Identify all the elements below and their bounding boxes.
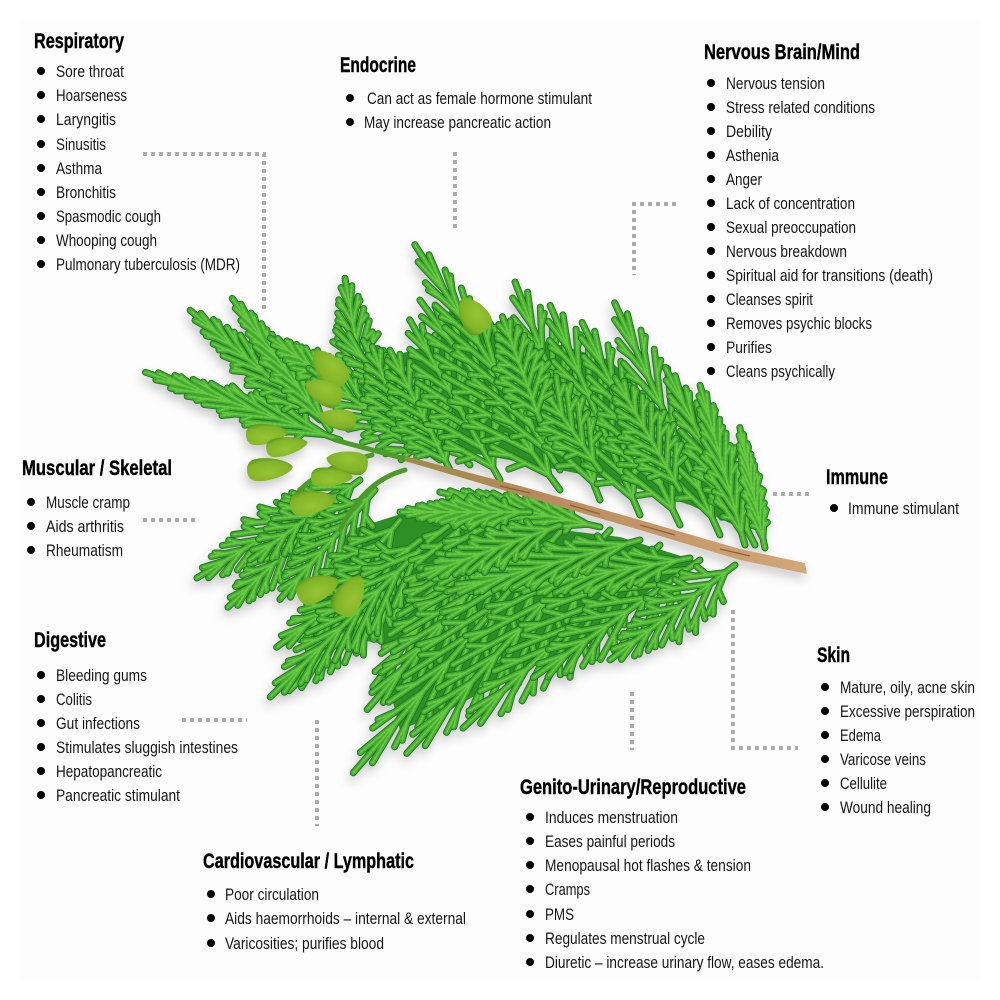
list: respiratory: Sinusitis: [56, 135, 106, 154]
list: respiratory: Whooping cough: [56, 231, 157, 250]
list: respiratory: Spasmodic cough: [56, 207, 161, 226]
connector: digestive: [182, 718, 247, 722]
thuja branch illustration: [140, 229, 807, 797]
list: genito-urinary/reproductive: [526, 808, 824, 972]
list: skin: Cellulite: [840, 774, 887, 793]
list: respiratory: Laryngitis: [56, 110, 116, 129]
list: immune: Immune stimulant: [848, 499, 959, 518]
list: respiratory: Bronchitis: [56, 183, 116, 202]
upper foliage: [140, 229, 776, 555]
list: genito-urinary/reproductive: Induces menstruation: [545, 808, 678, 827]
list: muscular / skeletal: Muscle cramp: [46, 493, 130, 512]
heading: respiratory: Respiratory: [34, 30, 124, 53]
panel: digestive: [34, 629, 238, 805]
list: digestive: [37, 666, 238, 805]
connector: immune: [773, 492, 810, 496]
list: digestive: Pancreatic stimulant: [56, 786, 180, 805]
list: nervous brain/mind: Sexual preoccupation: [726, 218, 856, 237]
list: nervous brain/mind: Nervous tension: [726, 74, 825, 93]
connector: respiratory: [143, 154, 264, 313]
heading: skin: Skin: [817, 644, 850, 667]
list: endocrine: Can act as female hormone stimulant: [367, 89, 592, 108]
stem: [300, 440, 807, 574]
heading: cardiovascular / lymphatic: Cardiovascular / Lymphatic: [203, 850, 414, 873]
list: genito-urinary/reproductive: Eases painful periods: [545, 832, 675, 851]
panel: nervous brain/mind: [704, 41, 933, 381]
list: nervous brain/mind: [707, 74, 933, 381]
list: digestive: Gut infections: [56, 714, 140, 733]
panel: endocrine: [340, 54, 592, 132]
list: nervous brain/mind: Cleanses spirit: [726, 290, 813, 309]
green seed cones: [245, 290, 496, 621]
heading: genito-urinary/reproductive: Genito-Urinary/Reproductive: [520, 776, 746, 799]
panel: muscular / skeletal: [22, 457, 172, 560]
list: genito-urinary/reproductive: PMS: [545, 905, 574, 924]
list: respiratory: Hoarseness: [56, 86, 127, 105]
list: endocrine: [346, 89, 592, 132]
list: nervous brain/mind: Anger: [726, 170, 762, 189]
list: nervous brain/mind: Lack of concentration: [726, 194, 855, 213]
heading: endocrine: Endocrine: [340, 54, 416, 77]
panel: skin: [817, 644, 975, 817]
list: skin: Edema: [840, 726, 881, 745]
list: cardiovascular / lymphatic: [207, 885, 466, 953]
list: skin: Wound healing: [840, 798, 931, 817]
heading: nervous brain/mind: Nervous Brain/Mind: [704, 41, 860, 64]
connector: skin: [733, 610, 798, 748]
list: digestive: Stimulates sluggish intestines: [56, 738, 238, 757]
panel: immune: [826, 466, 959, 518]
list: endocrine: May increase pancreatic action: [364, 113, 551, 132]
list: nervous brain/mind: Removes psychic blocks: [726, 314, 872, 333]
heading: immune: Immune: [826, 466, 888, 489]
list: respiratory: Sore throat: [56, 62, 124, 81]
list: cardiovascular / lymphatic: Aids haemorrhoids – internal & external: [225, 909, 466, 928]
list: nervous brain/mind: Nervous breakdown: [726, 242, 847, 261]
list: respiratory: Asthma: [56, 159, 102, 178]
list: skin: Varicose veins: [840, 750, 926, 769]
list: nervous brain/mind: Stress related conditions: [726, 98, 875, 117]
list: genito-urinary/reproductive: Regulates menstrual cycle: [545, 929, 705, 948]
heading: digestive: Digestive: [34, 629, 106, 652]
panel: cardiovascular / lymphatic: [203, 850, 466, 953]
connector: nervous: [634, 204, 676, 275]
list: digestive: Hepatopancreatic: [56, 762, 162, 781]
panel: genito-urinary/reproductive: [520, 776, 824, 972]
list: cardiovascular / lymphatic: Varicosities; purifies blood: [225, 934, 384, 953]
list: nervous brain/mind: Debility: [726, 122, 772, 141]
list: nervous brain/mind: Purifies: [726, 338, 772, 357]
list: muscular / skeletal: Aids arthritis: [46, 517, 124, 536]
list: respiratory: [37, 62, 240, 274]
panel: respiratory: [34, 30, 240, 274]
list: digestive: Colitis: [56, 690, 92, 709]
connector: cardiovascular: [315, 720, 319, 826]
list: cardiovascular / lymphatic: Poor circulation: [225, 885, 319, 904]
list: nervous brain/mind: Spiritual aid for transitions (death): [726, 266, 933, 285]
connector: muscular: [143, 518, 195, 522]
list: nervous brain/mind: Cleans psychically: [726, 362, 835, 381]
list: digestive: Bleeding gums: [56, 666, 147, 685]
list: muscular / skeletal: Rheumatism: [46, 541, 123, 560]
lower foliage: [182, 456, 753, 797]
list: genito-urinary/reproductive: Cramps: [545, 880, 590, 899]
connector: genito-urinary: [630, 692, 634, 750]
connector: endocrine: [453, 152, 457, 228]
list: respiratory: Pulmonary tuberculosis (MDR): [56, 255, 240, 274]
list: muscular / skeletal: [27, 493, 130, 560]
heading: muscular / skeletal: Muscular / Skeletal: [22, 457, 172, 480]
list: skin: [821, 678, 975, 817]
list: genito-urinary/reproductive: Menopausal hot flashes & tension: [545, 856, 751, 875]
list: nervous brain/mind: Asthenia: [726, 146, 779, 165]
list: genito-urinary/reproductive: Diuretic – increase urinary flow, eases edema.: [545, 953, 824, 972]
